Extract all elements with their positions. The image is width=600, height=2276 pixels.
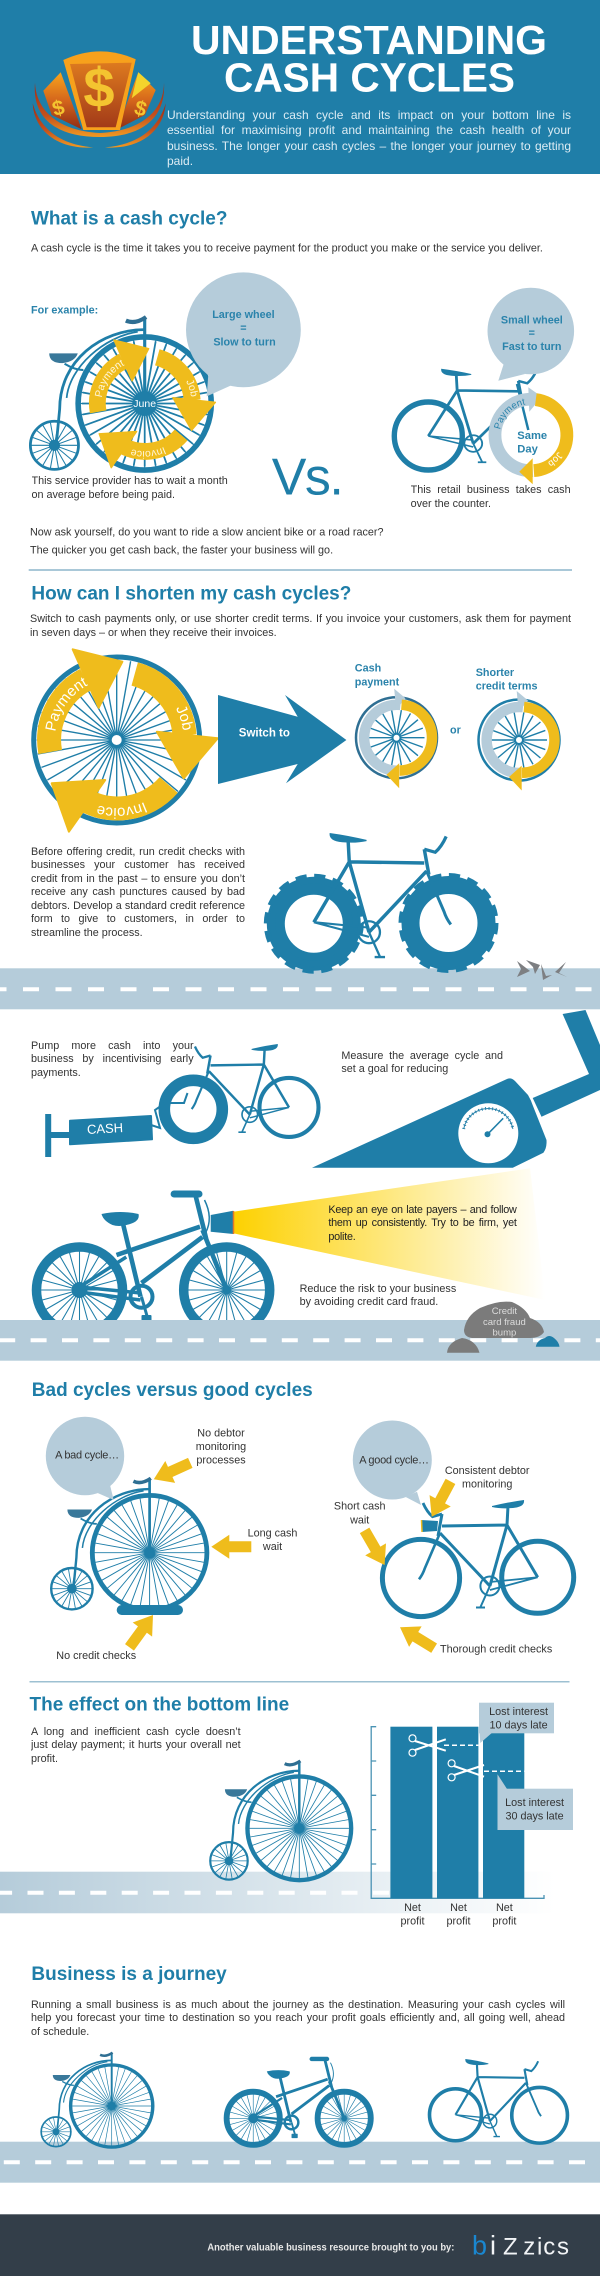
label: no credit checks — [56, 1608, 163, 1662]
closing question text: The quicker you get cash back, the faster your business will go. — [30, 544, 333, 556]
logo: bizzics: i — [490, 2230, 496, 2260]
title — [191, 17, 547, 101]
caption: service provider: on average before being paid. — [32, 489, 175, 501]
road with fraud bump: bump — [493, 1327, 516, 1338]
panel: measure — [312, 1010, 600, 1168]
late payers text: Keep an eye on late payers – and follow — [328, 1204, 517, 1216]
label: short cash wait — [334, 1500, 395, 1571]
icon: money wheel logo — [33, 51, 166, 148]
fraud text: Reduce the risk to your business — [300, 1282, 456, 1294]
bike: penny farthing — [41, 2053, 153, 2147]
penny farthing with arrows — [29, 272, 301, 473]
speech bubble: large wheel: Slow to turn — [213, 336, 276, 348]
road with fraud bump: Credit — [492, 1306, 517, 1317]
speech bubble: bad cycle: A bad cycle… — [55, 1450, 119, 1462]
road bike with same day cycle: Job — [548, 452, 562, 466]
logo: bizzics: s — [557, 2234, 569, 2260]
heading: The effect on the bottom line — [30, 1695, 289, 1716]
good road bike — [382, 1500, 574, 1617]
bike: ladies bike — [227, 2059, 371, 2145]
large wheel with arrows: Payment — [45, 678, 88, 731]
title: UNDERSTANDING — [191, 17, 547, 63]
fading road — [0, 1872, 555, 1913]
panel: bad cycles versus good cycles — [32, 1380, 574, 1662]
late payers text — [328, 1204, 517, 1248]
footer text: Another valuable business resource brought to you by: — [207, 2243, 454, 2254]
closing question text — [30, 527, 383, 556]
logo: bizzics: c — [543, 2234, 555, 2260]
speech bubble: large wheel: = — [240, 323, 247, 335]
caption: service provider — [32, 475, 232, 505]
panel: the effect on the bottom line — [0, 1695, 573, 1927]
label: thorough credit checks — [394, 1617, 553, 1658]
arrow: switch to — [218, 695, 346, 784]
speech bubble: small wheel: Small wheel — [501, 314, 563, 326]
label: consistent debtor monitoring — [421, 1465, 530, 1522]
late payers text: them up consistently. Try to be firm, yet — [328, 1217, 517, 1229]
callout: 30 days late: Lost interest — [505, 1797, 564, 1809]
bike: road racer — [430, 2059, 567, 2143]
wheel: cash payment: payment — [355, 676, 400, 688]
axis labels — [400, 1902, 516, 1927]
callout: 10 days late: Lost interest — [489, 1706, 548, 1718]
wheel: shorter credit terms: credit terms — [476, 681, 538, 693]
label: short cash wait: Short cash — [334, 1500, 386, 1512]
bad penny farthing — [51, 1478, 207, 1615]
label: or: or — [450, 724, 462, 736]
callout: 10 days late: 10 days late — [489, 1719, 548, 1731]
speech bubble: good cycle — [353, 1420, 432, 1505]
advice text: Switch to cash payments only, or use shorter credit terms. If you invoice your customers, ask them for payment — [30, 613, 571, 625]
penny farthing with arrows: Payment — [94, 360, 124, 397]
icon: cash pump: CASH — [87, 1120, 123, 1137]
heading: Business is a journey — [31, 1964, 227, 1985]
wheel: shorter credit terms — [476, 667, 560, 790]
panel: header — [0, 0, 600, 174]
advice text: in seven days – or when they receive their invoices. — [30, 626, 277, 638]
label: consistent debtor monitoring: monitoring — [462, 1479, 512, 1491]
road with spikes — [0, 960, 600, 1009]
bike with thick tyre — [164, 1044, 319, 1138]
icon: money wheel logo: $ — [50, 96, 67, 121]
label: long cash wait: Long cash — [248, 1528, 297, 1540]
axis labels: profit — [492, 1915, 516, 1927]
journey text: help you forecast your time to destination so you reach your profit goals efficiently and, all going well, ahead — [31, 2012, 565, 2024]
light beam — [233, 1168, 545, 1300]
measure text: Measure the average cycle and set a goal for reducing — [341, 1050, 503, 1075]
panel: how can I shorten my cash cycles — [30, 583, 571, 958]
label: no debtor monitoring — [149, 1428, 246, 1490]
road bike with same day cycle: Day — [517, 443, 539, 455]
logo: bizzics: z — [523, 2234, 535, 2260]
versus label: Vs. — [272, 448, 342, 506]
icon: money wheel logo: $ — [132, 96, 149, 122]
label: thorough credit checks: Thorough credit checks — [440, 1644, 553, 1656]
road — [0, 2142, 600, 2183]
ladies bike with lamp — [36, 1193, 270, 1333]
road with fraud bump — [0, 1302, 600, 1361]
speech bubble: large wheel — [186, 272, 301, 396]
arrow: switch to: Switch to — [239, 728, 290, 740]
axis labels: profit — [400, 1915, 425, 1927]
title: CASH CYCLES — [224, 55, 515, 101]
label: consistent debtor monitoring: Consistent debtor — [445, 1465, 530, 1477]
road bike with same day cycle: Same — [517, 430, 547, 442]
speech bubble: small wheel: Fast to turn — [502, 341, 561, 353]
large wheel with arrows: Invoice — [97, 802, 148, 819]
label: no debtor monitoring: processes — [196, 1455, 246, 1467]
heading: How can I shorten my cash cycles? — [31, 583, 351, 604]
wheel: cash payment: Cash — [355, 663, 381, 675]
heading: What is a cash cycle? — [31, 209, 227, 230]
example label: For example: — [31, 304, 98, 316]
fraud text: by avoiding credit card fraud. — [300, 1296, 438, 1308]
definition text: A cash cycle is the time it takes you to receive payment for the product you make or the service you deliver. — [31, 243, 543, 255]
penny farthing with arrows: Invoice — [131, 447, 166, 459]
axis labels: profit — [446, 1915, 471, 1927]
icon: cash pump — [45, 1093, 188, 1157]
logo: bizzics: Z — [503, 2234, 518, 2260]
speech bubble: small wheel — [488, 288, 574, 381]
panel: what is a cash cycle — [29, 209, 574, 556]
label: long cash wait — [211, 1528, 297, 1559]
caption: retail business: This retail business takes cash over the counter. — [411, 484, 571, 510]
panel: business is a journey — [0, 1964, 600, 2183]
logo: bizzics: b — [472, 2230, 487, 2260]
panel: pump — [31, 1040, 319, 1157]
closing question text: Now ask yourself, do you want to ride a slow ancient bike or a road racer? — [30, 527, 383, 539]
road bike with same day cycle: Payment — [494, 398, 526, 429]
caption: service provider: This service provider has to wait a month — [32, 475, 228, 487]
label: no debtor monitoring: No debtor — [197, 1428, 245, 1440]
logo: bizzics: i — [537, 2234, 542, 2260]
bar chart: net profit — [371, 1703, 573, 1927]
axis labels: Net — [404, 1902, 421, 1914]
intro text: Understanding your cash cycle and its impact on your bottom line is essential for maximising profit and maintaining the cash health of your business. The longer your cash cycles – the longer your journey to getting paid. — [167, 108, 571, 168]
speech bubble: good cycle: A good cycle… — [359, 1454, 429, 1466]
fraud text — [300, 1282, 470, 1312]
journey text: of schedule. — [31, 2026, 89, 2038]
speech bubble: small wheel: = — [529, 327, 535, 339]
footer — [0, 2214, 600, 2276]
label: short cash wait: wait — [349, 1514, 369, 1526]
wheel: shorter credit terms: Shorter — [476, 667, 515, 679]
callout: 10 days late — [479, 1703, 554, 1743]
late payers text: polite. — [328, 1230, 355, 1242]
journey text: Running a small business is as much about the journey as the destination. Measuring your cash cycles will — [31, 1998, 565, 2010]
icon: scissors — [448, 1760, 484, 1781]
pump text: Pump more cash into your business by incentivising early payments. — [31, 1040, 194, 1078]
effect text: A long and inefficient cash cycle doesn’t just delay payment; it hurts your overall net profit. — [31, 1726, 241, 1764]
speech bubble: large wheel: Large wheel — [212, 309, 275, 321]
wheel: cash payment — [355, 663, 437, 788]
penny farthing with arrows: Job — [186, 380, 198, 396]
axis labels: Net — [450, 1902, 467, 1914]
speech bubble: bad cycle — [46, 1417, 124, 1500]
penny farthing with arrows: June — [133, 398, 156, 410]
road with fraud bump: card fraud — [483, 1317, 526, 1328]
large wheel with arrows: Job — [176, 706, 193, 730]
icon: money wheel logo: $ — [83, 56, 115, 119]
heading: Bad cycles versus good cycles — [32, 1380, 313, 1401]
credit checks text: Before offering credit, run credit checks with businesses your customer has received credit from in the past – to ensure you don’t receive any cash punctures caused by bad debtors. Develop a standard credit reference form to give to customers, in order to streamline the process. — [31, 846, 245, 938]
icon: pressure gauge — [312, 1010, 600, 1168]
fat tyre bike with gear wheels — [267, 833, 496, 971]
callout: 30 days late — [498, 1774, 573, 1830]
callout: 30 days late: 30 days late — [505, 1810, 564, 1822]
panel: light beam — [36, 1168, 545, 1333]
label: no credit checks: No credit checks — [56, 1650, 137, 1662]
road bike with same day cycle — [392, 288, 574, 484]
advice text — [30, 613, 571, 643]
axis labels: Net — [496, 1902, 513, 1914]
label: long cash wait: wait — [262, 1541, 282, 1553]
icon: scissors — [409, 1735, 446, 1756]
large wheel with arrows — [31, 648, 218, 833]
penny farthing — [210, 1761, 351, 1880]
journey text — [31, 1998, 565, 2042]
label: no debtor monitoring: monitoring — [196, 1441, 246, 1453]
